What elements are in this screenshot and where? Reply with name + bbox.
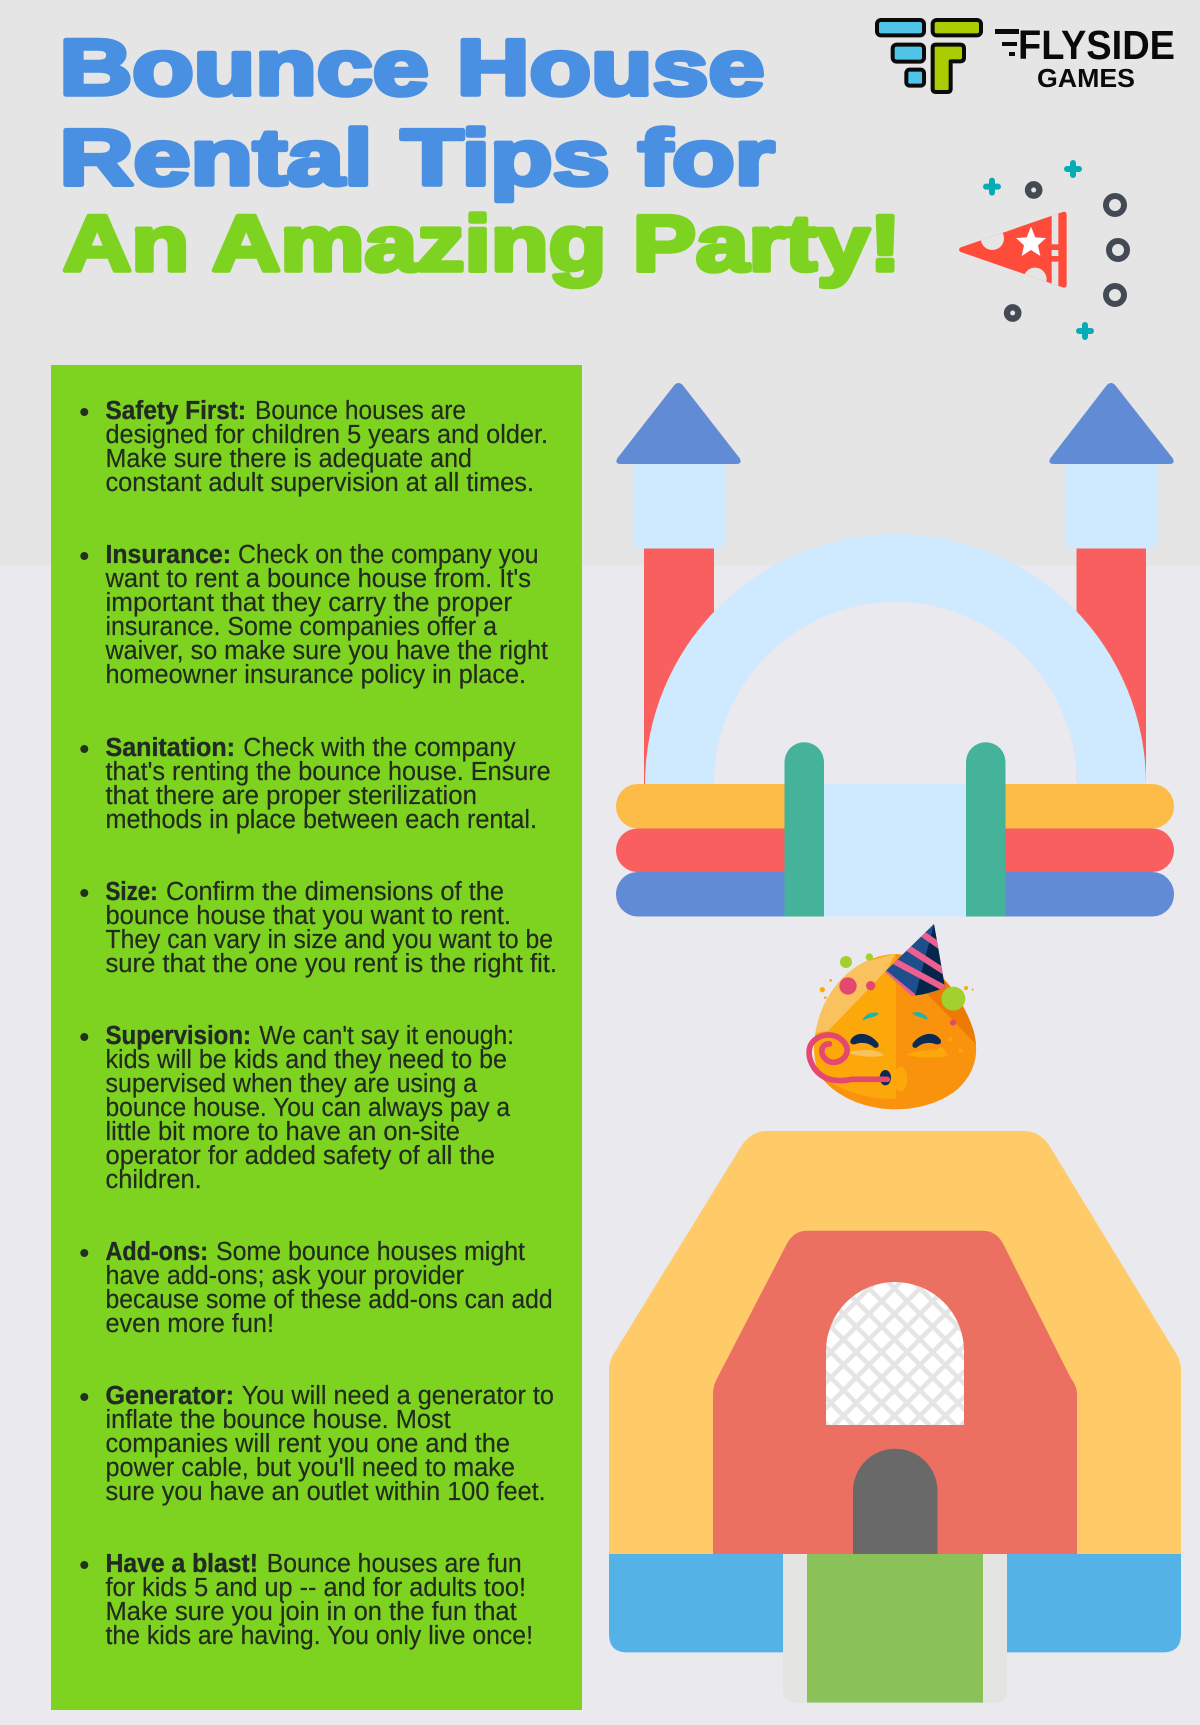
tip: Insurance: homeowner insurance policy in place. <box>106 661 526 689</box>
logo subtitle: GAMES <box>1037 63 1135 93</box>
confetti plus signs <box>986 163 1091 337</box>
tip: Insurance: waiver, so make sure you have the right <box>105 637 548 665</box>
arch <box>645 534 1146 784</box>
title line 2: Rental Tips for <box>60 112 774 201</box>
tip: Safety First: Safety First: <box>106 397 246 425</box>
tip: Have a blast: Bounce houses are fun <box>267 1550 522 1578</box>
tip: Size: Size: <box>106 878 158 906</box>
ramp edges <box>783 1554 1007 1703</box>
right entrance post <box>966 742 1006 916</box>
lips <box>894 1067 907 1091</box>
icon: party emoji with hat and blower <box>809 920 982 1113</box>
right tower pillar <box>1076 540 1146 784</box>
face <box>814 954 976 1110</box>
mesh window <box>826 1282 964 1425</box>
panel: tips list <box>51 365 582 1710</box>
title line 3: An Amazing Party! <box>63 198 901 287</box>
logo stripes <box>995 29 1019 56</box>
tip: Add-ons: Add-ons: <box>106 1238 208 1266</box>
tip: Generator: You will need a generator to <box>242 1382 554 1410</box>
tip: Have a blast: for kids 5 and up -- and for adults too! <box>106 1574 526 1602</box>
background: upper band <box>0 0 1200 566</box>
tip: Add-ons: have add-ons; ask your provider <box>106 1262 464 1290</box>
icon: party popper flag with confetti <box>959 163 1127 337</box>
arch background opening <box>714 602 1077 784</box>
tip: Size: They can vary in size and you want to be <box>106 926 553 954</box>
tip: Size: sure that the one you rent is the right fit. <box>106 950 557 978</box>
tip: Insurance: Check on the company you <box>238 541 539 569</box>
party hat <box>885 924 945 996</box>
confetti dots <box>820 953 974 1053</box>
tip: Have a blast <box>80 1550 533 1650</box>
tip: Insurance: insurance. Some companies offer a <box>106 613 498 641</box>
tip: Sanitation: Sanitation: <box>106 734 235 762</box>
illustration: bounce house with slide <box>609 1131 1181 1703</box>
tip: Safety First: constant adult supervision at all times. <box>106 469 534 497</box>
tip: Generator: inflate the bounce house. Most <box>106 1406 451 1434</box>
tip: Generator: Generator: <box>106 1382 234 1410</box>
tip: Supervision: operator for added safety of all the <box>106 1142 495 1170</box>
left tower top <box>632 455 725 548</box>
tip: Generator: companies will rent you one and the <box>106 1430 510 1458</box>
left tower pillar <box>644 540 714 784</box>
tip: Add-ons: because some of these add-ons can add <box>106 1286 553 1314</box>
tip: Insurance <box>80 541 548 689</box>
tip: Have a blast: the kids are having. You only live once! <box>106 1622 533 1650</box>
tip: Safety First: designed for children 5 years and older. <box>106 421 548 449</box>
logo: Flyside Games <box>877 20 1175 93</box>
tip: Safety First <box>80 397 548 497</box>
tip: Supervision: We can't say it enough: <box>259 1022 514 1050</box>
right roof <box>1049 383 1174 464</box>
logo mark <box>877 20 981 92</box>
tip: Supervision: little bit more to have an on-site <box>106 1118 460 1146</box>
blue base <box>609 1554 1181 1652</box>
left eyebrow <box>862 1012 879 1021</box>
logo wordmark: FLYSIDE <box>1018 22 1175 68</box>
flag <box>959 210 1067 291</box>
tip: Sanitation: that's renting the bounce house. Ensure <box>106 758 551 786</box>
tip: Sanitation: methods in place between each rental. <box>106 806 537 834</box>
tip: Insurance: want to rent a bounce house from. It's <box>105 565 531 593</box>
tip: Safety First: Make sure there is adequate and <box>106 445 472 473</box>
tip: Size: Confirm the dimensions of the <box>166 878 504 906</box>
title <box>60 22 901 287</box>
entrance <box>824 784 966 916</box>
background: lower band <box>0 566 1200 1725</box>
blue tube <box>616 872 1174 916</box>
green ramp <box>807 1554 983 1703</box>
tip: Add-ons: Some bounce houses might <box>216 1238 525 1266</box>
tip: Have a blast: Make sure you join in on the fun that <box>106 1598 517 1626</box>
tip: Sanitation <box>80 734 551 834</box>
party blower <box>809 1035 887 1081</box>
tip: Generator: power cable, but you'll need to make <box>106 1454 515 1482</box>
left eye <box>850 1034 879 1048</box>
tip: Supervision: bounce house. You can always pay a <box>106 1094 511 1122</box>
confetti rings <box>1007 184 1127 319</box>
tip: Size: bounce house that you want to rent. <box>106 902 511 930</box>
right eye <box>912 1034 941 1048</box>
tip: Supervision: supervised when they are using a <box>106 1070 478 1098</box>
tip: Add-ons: even more fun! <box>106 1310 274 1338</box>
left roof <box>616 383 741 464</box>
tip: Sanitation: Check with the company <box>243 734 516 762</box>
tip: Supervision: children. <box>106 1166 202 1194</box>
yellow tube <box>616 784 1174 828</box>
tip: Supervision <box>80 1022 514 1194</box>
left entrance post <box>784 742 824 916</box>
tip: Size <box>80 878 557 978</box>
red tube <box>616 828 1174 872</box>
title line 1: Bounce House <box>60 22 764 111</box>
yellow outer shell <box>609 1131 1181 1555</box>
tip: Have a blast: Have a blast! <box>106 1550 258 1578</box>
tip: Insurance: important that they carry the proper <box>106 589 513 617</box>
tip: Supervision: Supervision: <box>106 1022 251 1050</box>
red inner wall <box>713 1231 1077 1555</box>
left cheek <box>848 1050 884 1057</box>
right eyebrow <box>912 1012 928 1020</box>
right tower top <box>1065 455 1157 548</box>
mouth <box>880 1070 891 1085</box>
tip: Supervision: kids will be kids and they need to be <box>106 1046 507 1074</box>
tip: Add-ons <box>80 1238 553 1338</box>
tip: Generator: sure you have an outlet within 100 feet. <box>106 1478 546 1506</box>
tip: Sanitation: that there are proper sterilization <box>106 782 477 810</box>
right cheek <box>907 1047 948 1057</box>
tip: Generator <box>80 1382 554 1506</box>
illustration: bounce castle <box>616 383 1174 916</box>
tip: Safety First: Bounce houses are <box>255 397 466 425</box>
tip: Insurance: Insurance: <box>106 541 231 569</box>
door <box>853 1449 938 1555</box>
